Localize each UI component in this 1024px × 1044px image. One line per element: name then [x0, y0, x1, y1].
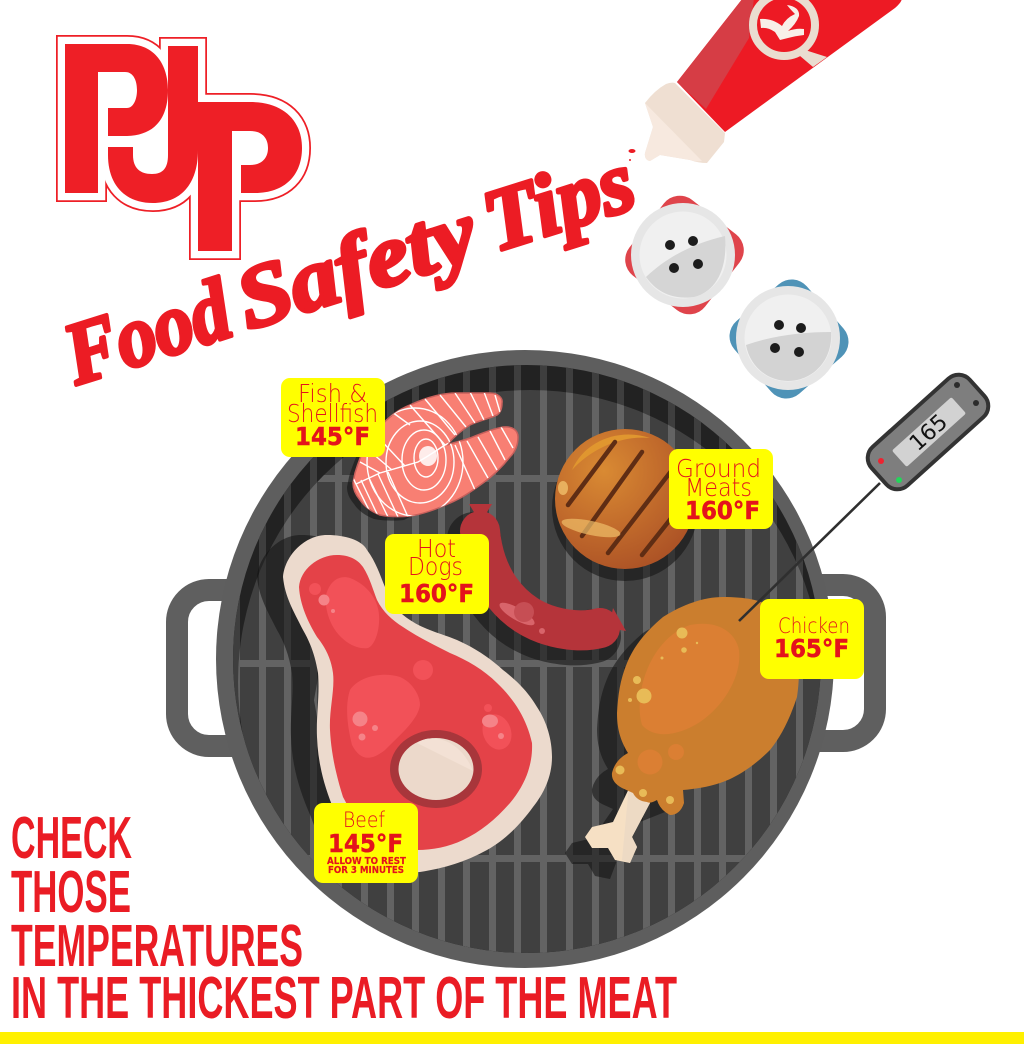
- thermometer body: [862, 369, 994, 495]
- label: beef: ALLOW TO REST: [327, 856, 406, 867]
- chicken body: [612, 597, 799, 815]
- label: fish and shellfish: Shellfish: [287, 399, 378, 428]
- label: ground meats: 160°F: [685, 496, 760, 525]
- thermometer probe: [739, 483, 880, 621]
- label: ground meats: Ground: [676, 454, 761, 483]
- label: beef: FOR 3 MINUTES: [328, 865, 404, 876]
- hot dog: [469, 504, 626, 634]
- chicken leg: [585, 597, 799, 863]
- title: Food Safety Tips: Tips: [472, 133, 646, 271]
- label: chicken: Chicken: [778, 614, 850, 638]
- grill: [177, 350, 875, 974]
- logo: PJP: [65, 44, 302, 251]
- steak highlights: [309, 577, 516, 758]
- food shadows: [257, 409, 703, 879]
- grill grate: [225, 390, 825, 974]
- yellow footer bar: [0, 1032, 1024, 1044]
- chicken bone: [585, 780, 650, 863]
- label: fish and shellfish: 145°F: [295, 422, 370, 451]
- bottle body: [677, 0, 902, 132]
- bottle side shading: [677, 0, 754, 109]
- label: fish and shellfish: [281, 378, 385, 457]
- chicken fat beads: [616, 628, 698, 804]
- title: Food Safety Tips: [52, 133, 646, 404]
- label: hot dogs: Dogs: [408, 552, 463, 581]
- bottle nozzle highlight: [645, 103, 702, 161]
- bottle cap: [645, 83, 725, 163]
- grill handle: right: [775, 585, 875, 741]
- label: ground meats: Meats: [685, 473, 752, 502]
- label: hot dogs: [385, 534, 489, 614]
- label: ground meats: [669, 449, 773, 529]
- label: hot dogs: 160°F: [399, 579, 474, 608]
- shaker: red: [617, 188, 752, 322]
- label: chicken: [760, 599, 864, 679]
- thermometer reading: 165: [905, 410, 953, 456]
- headline: check those temperatures: TEMPERATURES: [11, 913, 303, 979]
- steak bone: [390, 730, 482, 808]
- grill outer rim: [216, 350, 834, 968]
- chicken highlight: [640, 624, 739, 734]
- headline: check those temperatures: THOSE: [11, 859, 131, 925]
- label: chicken: 165°F: [774, 634, 849, 663]
- headline: check those temperatures: [11, 805, 677, 1031]
- fish steak: [353, 392, 518, 517]
- grill inner bowl: [233, 365, 821, 953]
- thermometer display: [892, 397, 966, 467]
- label: hot dogs: Hot: [417, 534, 456, 563]
- steak meat: [299, 555, 532, 850]
- thermometer: [739, 369, 994, 621]
- burger patty: [555, 429, 695, 569]
- label: fish and shellfish: Fish &: [298, 379, 367, 408]
- steak fat: [283, 535, 552, 873]
- bottle label ring: [753, 0, 827, 67]
- sauce drops: [628, 149, 636, 161]
- label: beef: [314, 803, 418, 883]
- headline: check those temperatures: CHECK: [11, 805, 132, 871]
- title: Food Safety Tips: Safety: [225, 183, 489, 349]
- shaker: blue: [721, 271, 857, 407]
- title: Food Safety Tips: Food: [52, 261, 244, 404]
- sauce bottle: [628, 0, 902, 163]
- beef steak: [283, 535, 552, 873]
- grill handle: left: [177, 590, 277, 746]
- label: beef: 145°F: [328, 829, 403, 858]
- label: beef: Beef: [343, 808, 386, 832]
